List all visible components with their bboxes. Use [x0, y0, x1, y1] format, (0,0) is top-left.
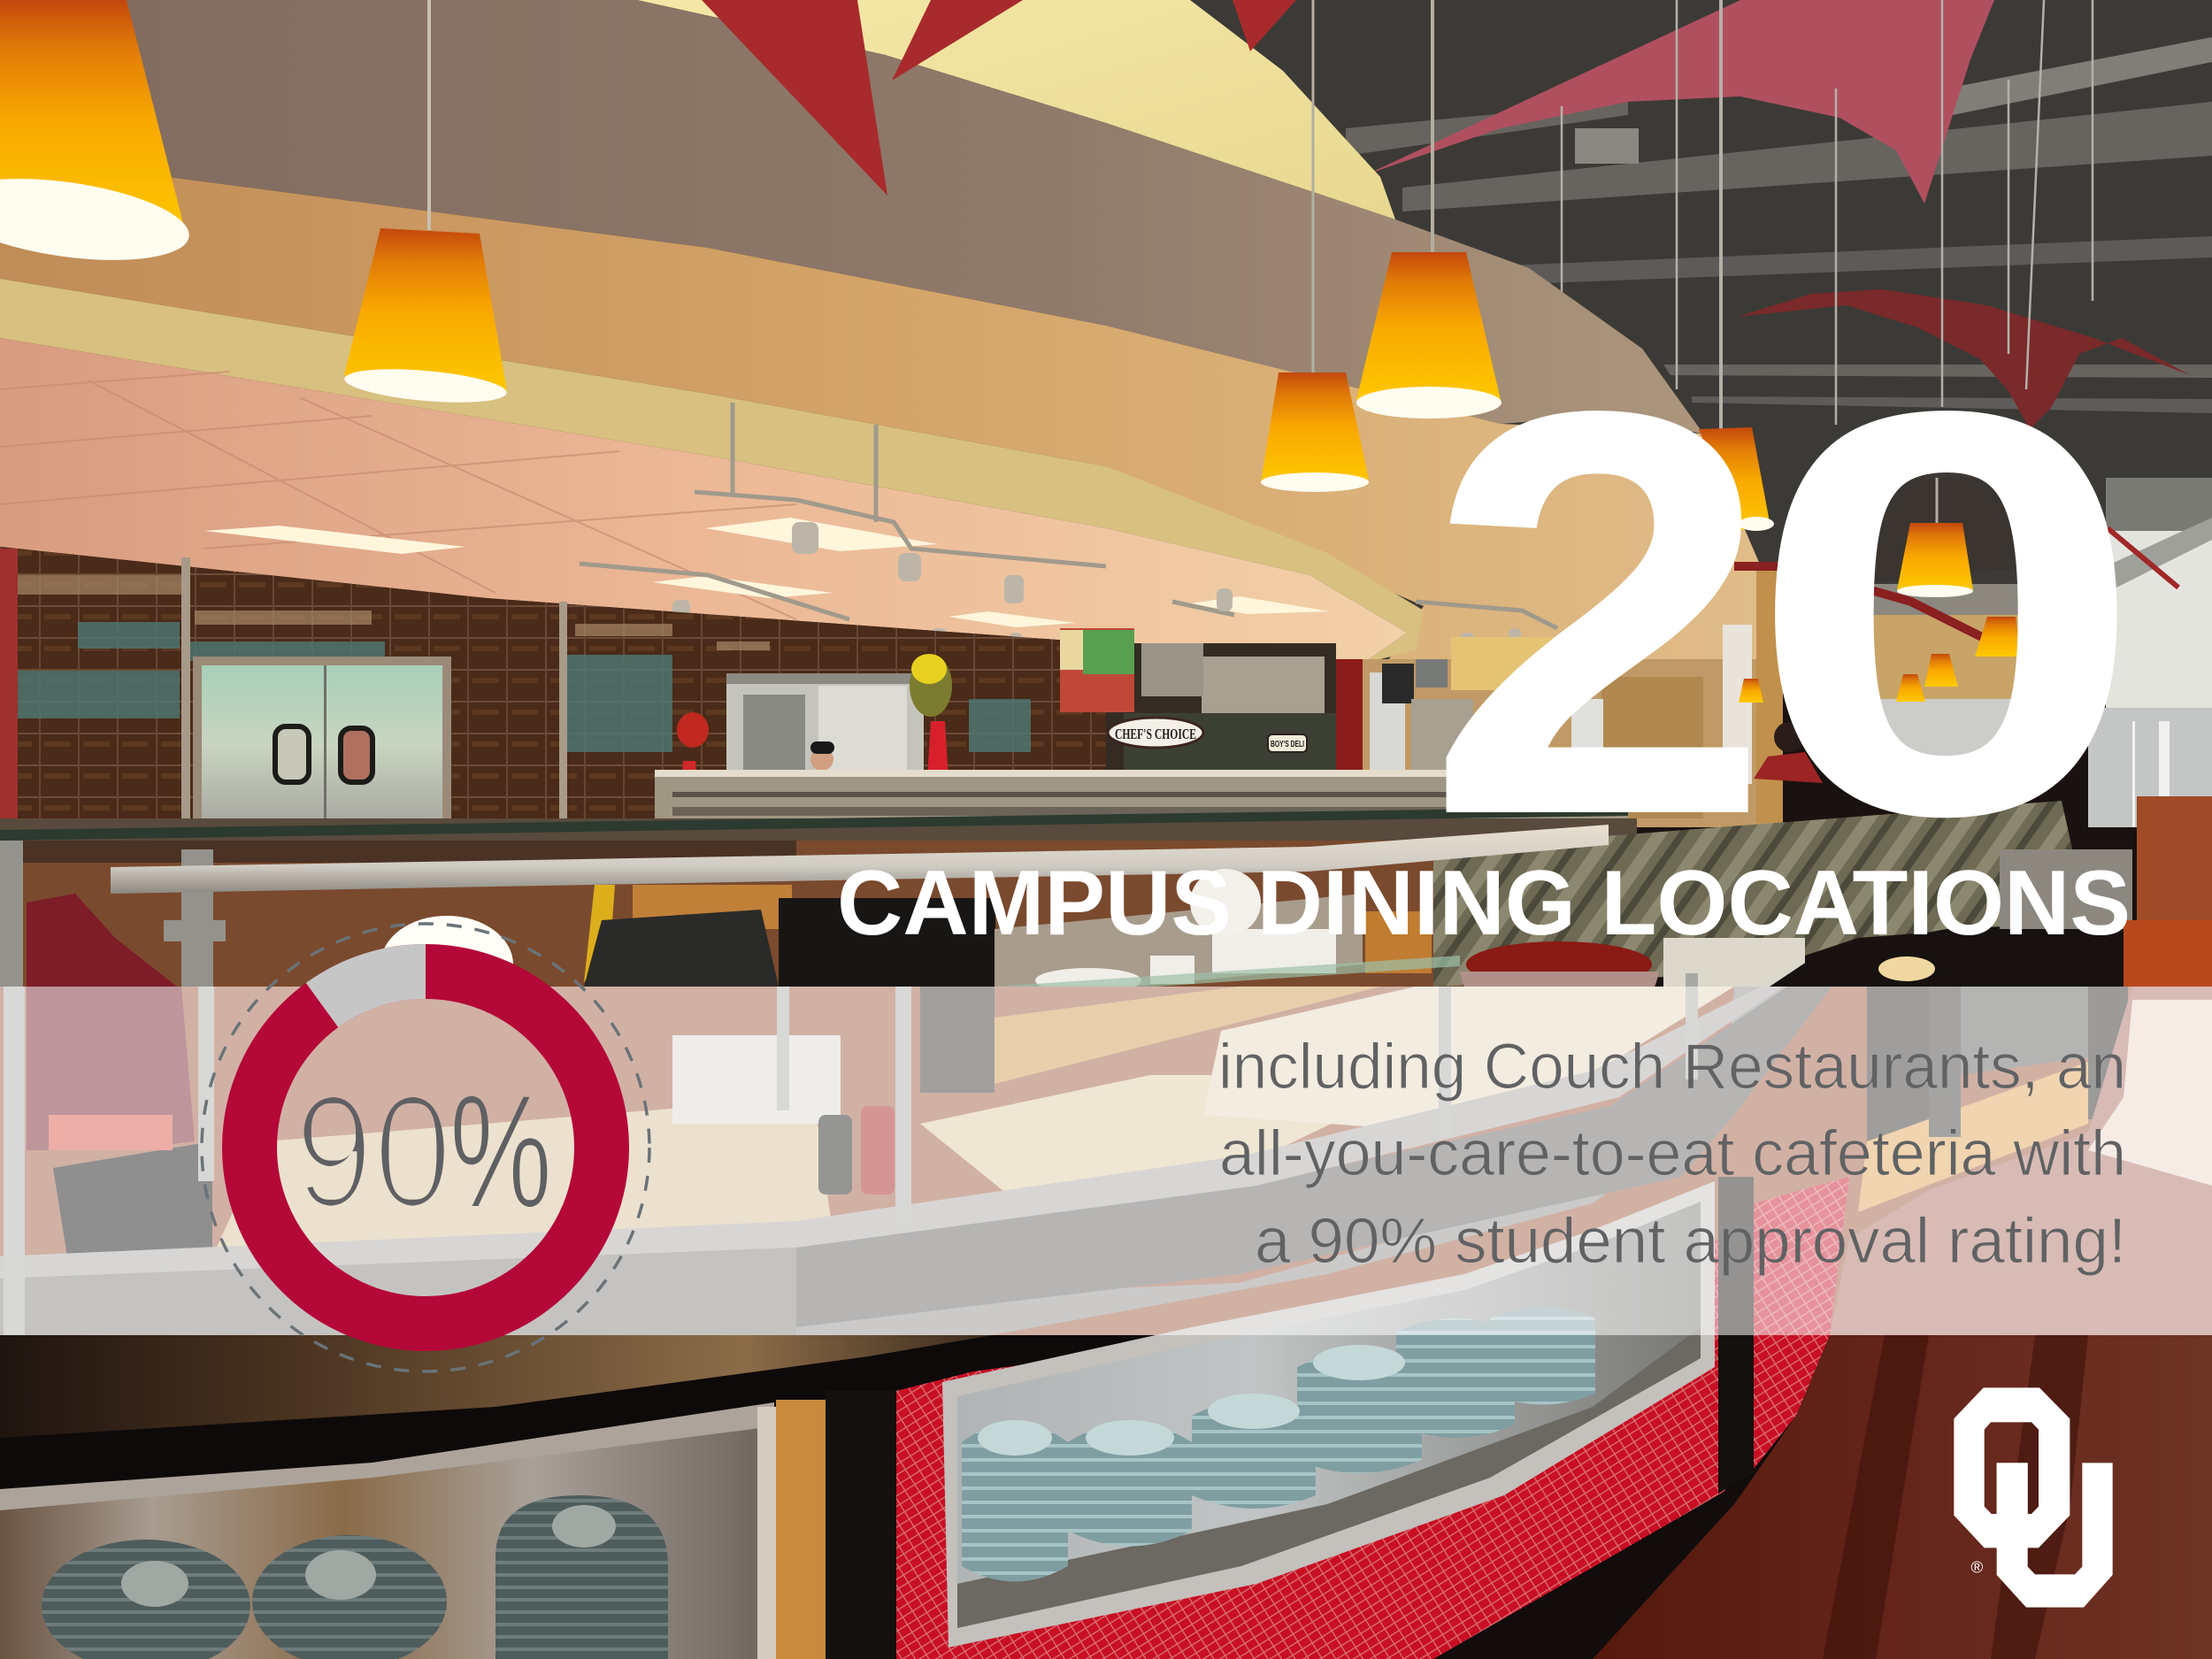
description text: all-you-care-to-eat cafeteria with	[1219, 1118, 2126, 1189]
scene beneath band base	[0, 987, 2212, 1335]
glass arcade on right	[2088, 478, 2212, 827]
teal tile patches	[18, 622, 1031, 752]
chef	[810, 741, 834, 771]
wood cabinet	[1601, 677, 1703, 818]
plate highlights	[121, 1505, 616, 1607]
red floral vase	[677, 712, 709, 827]
middle backdrop behind rod	[0, 823, 1637, 991]
lamp: inside zero mid	[1975, 617, 2021, 657]
OU logo: ®	[1970, 1557, 1983, 1576]
red wall strip	[0, 549, 18, 832]
lamp: inside zero small	[1924, 654, 1958, 687]
steel wall trims	[181, 557, 567, 832]
red tile mosaic	[896, 1239, 1725, 1659]
heading: CAMPUS DINING LOCATIONS	[837, 852, 2131, 955]
steel cases on salad bar	[2000, 849, 2132, 929]
steel door	[193, 657, 451, 825]
upper wall right of column	[1756, 566, 1783, 823]
black table cloth	[584, 910, 779, 987]
monitors	[1382, 659, 1473, 787]
case steel trim	[0, 1402, 774, 1510]
red canopy near	[1367, 0, 1994, 204]
floor shine	[2088, 1000, 2212, 1186]
stacked white plates	[1035, 929, 1336, 993]
white sphere	[1190, 869, 1261, 936]
kitchen window	[726, 673, 924, 784]
hood shadow wall	[1124, 713, 1336, 780]
mosaic right	[1754, 1177, 1849, 1469]
dark cabinet	[779, 898, 995, 987]
black counter top	[0, 1335, 1192, 1489]
red fruit	[1466, 941, 1652, 987]
red arc	[250, 972, 602, 1324]
lamp: top left	[0, 0, 194, 273]
steel shelf	[957, 1327, 1701, 1628]
plate tops	[978, 1345, 1405, 1455]
chef's choice sign: CHEF'S CHOICE	[1115, 726, 1196, 742]
back kitchen wall	[1106, 643, 1336, 820]
wood strip	[776, 1400, 826, 1659]
back serving counter	[655, 770, 1628, 825]
description text	[1218, 1032, 2126, 1277]
right case frames	[1858, 987, 2128, 1212]
glass shelf edge	[0, 807, 1628, 841]
tiled wall	[0, 547, 1106, 841]
description text: a 90% student approval rating!	[1255, 1206, 2126, 1277]
back window	[1141, 643, 1203, 696]
grey arc	[322, 972, 426, 1005]
grey soffit band	[106, 0, 1703, 434]
percent digits: 90	[295, 1061, 452, 1241]
far ceiling inside zero	[1858, 478, 2035, 584]
donut chart 90%	[202, 924, 649, 1371]
big number 20: 0	[1747, 292, 2147, 934]
cream dome wall	[637, 0, 1395, 219]
snack packs	[49, 1115, 173, 1150]
light tile streaks	[18, 575, 770, 650]
ceiling lights	[204, 518, 1330, 627]
OU logo	[1954, 1387, 2113, 1608]
maroon apron	[27, 894, 177, 987]
red arch inside zero	[1734, 566, 2000, 646]
tray second	[920, 1075, 1433, 1217]
back floor orange	[633, 885, 792, 929]
glass plate stacks	[962, 1308, 1595, 1582]
white window by wall	[1370, 672, 1405, 796]
ceiling ducts	[1346, 37, 2212, 413]
ceiling grid	[0, 372, 796, 619]
plate stacks left	[42, 1495, 668, 1659]
case interior	[0, 1426, 761, 1659]
glass shelf back	[0, 818, 1637, 841]
lamp: centre small	[1261, 0, 1369, 492]
wood panel	[1365, 911, 1432, 973]
lamp: behind two	[1699, 427, 1774, 531]
rail	[111, 825, 1609, 894]
upper glass sheets	[0, 956, 1460, 1055]
maroon shirt	[27, 987, 195, 1150]
white counter trays	[1663, 938, 1805, 991]
track lights	[580, 403, 1557, 628]
red canopy far	[1737, 289, 2190, 429]
hanging cords	[1562, 0, 2093, 429]
tray left	[195, 1097, 832, 1301]
white globe	[380, 916, 513, 1013]
dark band above rod	[0, 841, 796, 863]
vase with yellow flowers	[910, 654, 952, 779]
light panel	[1571, 699, 1603, 761]
hood	[1202, 657, 1325, 713]
big number 20	[1425, 292, 2147, 935]
dashed ring	[202, 924, 649, 1371]
lamp: left pendant	[343, 0, 508, 408]
dark pillar	[920, 987, 995, 1093]
white wrapping trays	[1203, 987, 1734, 1128]
glowing wall	[1451, 637, 1610, 690]
red column	[1336, 659, 1363, 827]
lamp: tiny far	[1739, 679, 1763, 703]
rear salad bar	[1433, 801, 2088, 987]
description text: including Couch Restaurants, an	[1218, 1032, 2126, 1102]
black case column	[1718, 1177, 1754, 1494]
vertical posts	[4, 973, 1698, 1335]
floor	[1575, 1335, 2212, 1659]
lamp: inside zero large	[1897, 478, 1973, 597]
counter steel	[0, 987, 1832, 1335]
black skirt	[1433, 1335, 1830, 1659]
orange floor	[2124, 920, 2212, 991]
dark ceiling	[1062, 0, 2212, 672]
red host counter	[2137, 796, 2212, 920]
glass bowl	[1460, 972, 1659, 1039]
gloss under band	[0, 1335, 993, 1438]
shelf items	[672, 1035, 841, 1124]
chef's choice sign	[1108, 718, 1203, 748]
glass hardware at left	[0, 841, 226, 987]
light fascia	[0, 279, 1424, 664]
tile ceiling	[0, 338, 1407, 664]
lamp: centre large	[1356, 0, 1502, 419]
translucent white band	[0, 987, 2212, 1335]
right dining area wall	[1363, 659, 1778, 827]
floor streaks	[1823, 1335, 2088, 1659]
percent sign: %	[449, 1061, 552, 1241]
deli sign	[1268, 734, 1307, 752]
black counter edge	[1770, 920, 2137, 991]
white column	[1723, 625, 1752, 784]
window frame	[942, 1181, 1715, 1647]
steel edge of case	[757, 1407, 776, 1659]
condiment bottles	[818, 1106, 895, 1194]
glowing reflection	[1878, 956, 1935, 981]
plate shelf	[995, 894, 1363, 1000]
window interior	[957, 1202, 1701, 1628]
wood cabinet beneath shelf	[995, 987, 1380, 1084]
bucket	[53, 1141, 212, 1335]
deli sign: BOY'S DELI	[1271, 740, 1304, 749]
big number 20: 2	[1425, 293, 1773, 935]
red triangle banners	[702, 0, 1296, 196]
track light heads	[672, 522, 1521, 684]
black column	[826, 1391, 896, 1659]
counter surface	[0, 987, 1814, 1335]
lamp: inside zero smaller	[1896, 674, 1925, 702]
steel counter top highlight	[0, 987, 1783, 1279]
lower front counter	[0, 1248, 796, 1335]
woman in red behind counter	[1754, 722, 1823, 783]
floor under band	[1830, 987, 2212, 1335]
yellow wet floor sign	[584, 885, 615, 982]
menu board	[1060, 628, 1134, 712]
lamps	[0, 0, 2021, 703]
tan soffit	[0, 177, 1761, 672]
